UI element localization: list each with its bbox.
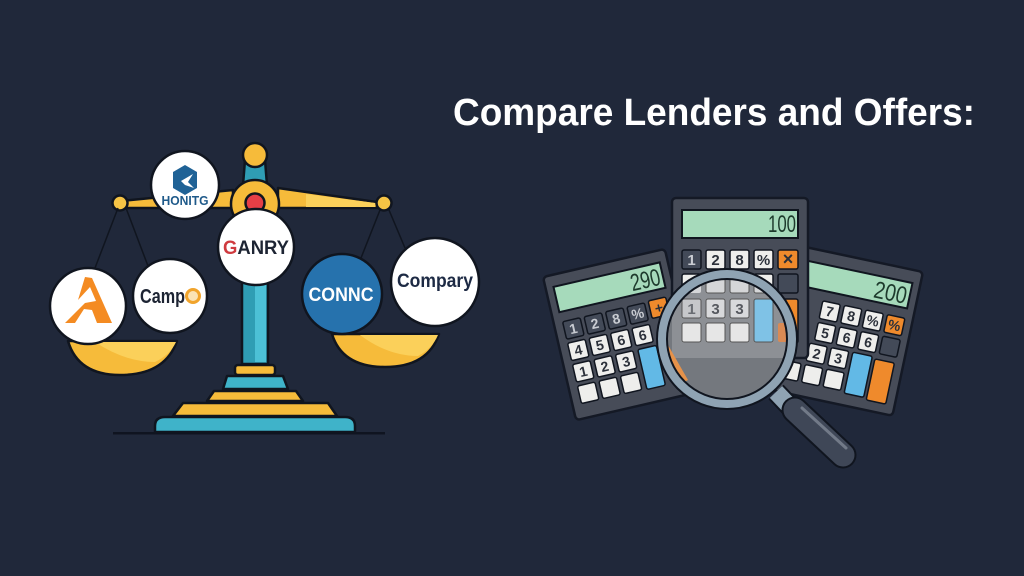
title: Compare Lenders and Offers: [453, 92, 975, 134]
right calculator: % [865, 312, 881, 330]
logo: Honitg: HONITG [162, 193, 208, 208]
magnifying glass lens [660, 270, 800, 410]
scale column [242, 270, 268, 364]
right calculator: 5 [820, 324, 831, 342]
left calculator: 2 [589, 315, 601, 332]
left calculator: 290 [628, 264, 663, 297]
logo: Company [391, 238, 479, 326]
scale base [155, 365, 355, 432]
logo: Campo: Camp [140, 286, 185, 308]
left calculator: 6 [637, 326, 648, 344]
right calculator: 2 [811, 345, 822, 362]
left calculator: 4 [573, 341, 584, 359]
balance scale with lender logos [50, 143, 479, 434]
logo: orange A [50, 268, 126, 344]
right calculator: 8 [846, 307, 857, 325]
right calculator: 6 [841, 329, 852, 346]
left calculator [543, 249, 698, 420]
center calculator: 1 [687, 252, 696, 269]
pivot [231, 180, 279, 228]
logo: Campo [133, 259, 207, 333]
ground line [113, 432, 385, 434]
center calculator: 100 [768, 211, 796, 238]
left calculator: 3 [621, 353, 632, 370]
top post and finial [243, 143, 267, 185]
scale chains [95, 208, 405, 268]
logo: Honitg [151, 151, 219, 219]
magnifying glass handle [776, 392, 846, 455]
center calculator: 8 [735, 252, 744, 269]
magnifying glass lens: 1 [687, 301, 696, 318]
calculators and magnifying glass [543, 198, 923, 455]
right calculator: % [887, 316, 903, 334]
left calculator: 1 [568, 320, 579, 337]
center calculator: 2 [711, 252, 720, 269]
left calculator: 5 [594, 336, 606, 354]
right calculator: 7 [824, 303, 835, 320]
right calculator: 200 [871, 277, 909, 310]
left calculator: 6 [616, 331, 627, 349]
center calculator [672, 198, 808, 358]
right calculator: 6 [863, 334, 874, 351]
right calculator [770, 246, 923, 416]
center calculator: % [757, 252, 770, 269]
right calculator: 3 [833, 350, 844, 367]
scale beam [112, 188, 392, 210]
left calculator: 2 [599, 358, 610, 375]
logo: Connc: CONNC [308, 285, 374, 306]
magnifying glass lens: 3 [711, 301, 720, 318]
magnifying glass lens: 3 [735, 301, 744, 318]
logo: Ganry [218, 209, 294, 285]
left pan [68, 341, 177, 375]
logo: Connc [302, 254, 382, 334]
left calculator: 1 [578, 363, 589, 380]
left calculator: + [653, 299, 665, 316]
logo: Company: Compary [397, 271, 473, 292]
left calculator: % [630, 304, 646, 323]
center calculator: × [783, 249, 793, 269]
left calculator: 8 [611, 310, 622, 327]
right pan [332, 334, 439, 367]
logo: Ganry: GANRY [223, 238, 289, 259]
